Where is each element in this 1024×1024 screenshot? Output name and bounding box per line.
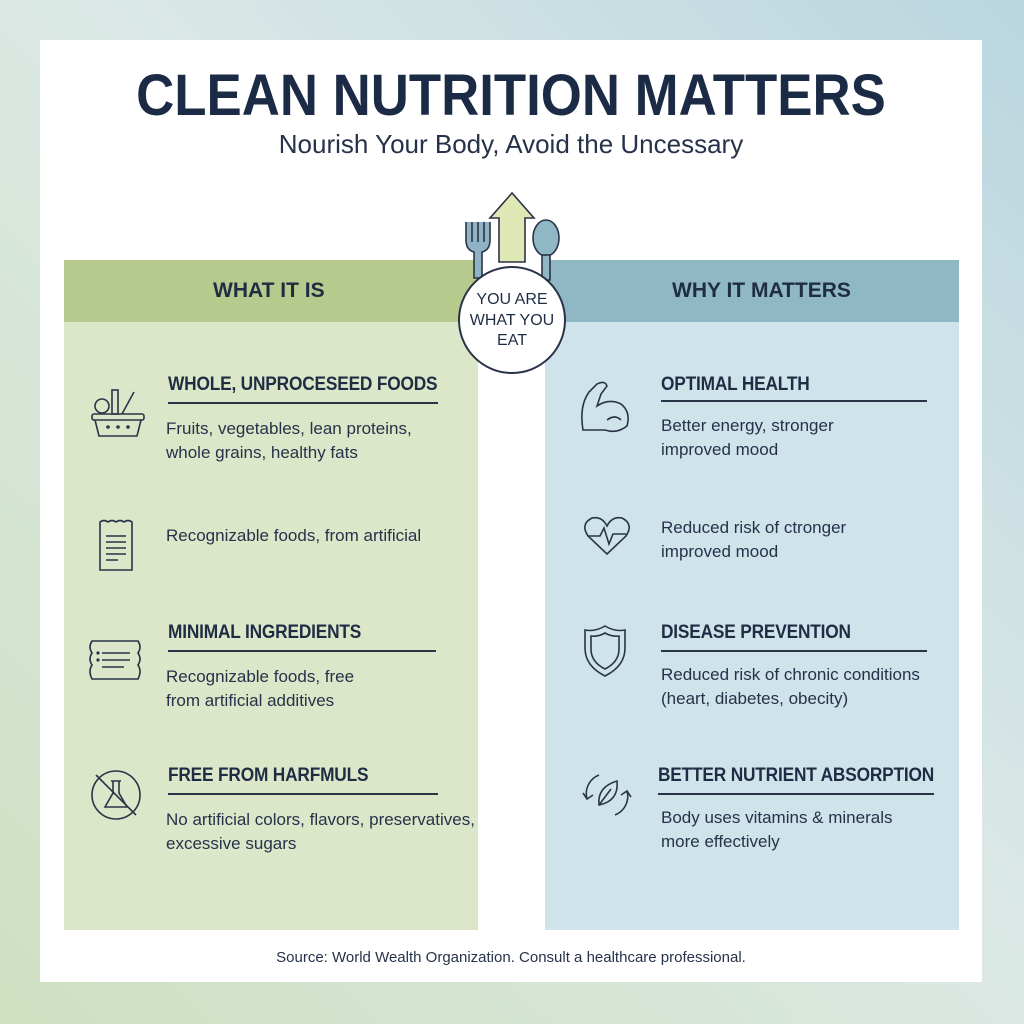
icon: shield <box>584 625 626 677</box>
panel: why it matters <box>545 260 959 930</box>
icon: ingredient list <box>89 640 141 680</box>
header: what it is: WHAT IT IS <box>213 279 325 302</box>
item: whole foods: whole grains, healthy fats <box>166 443 358 462</box>
header: why it matters: WHY IT MATTERS <box>672 279 851 302</box>
item: disease prevention: DISEASE PREVENTION <box>661 622 851 643</box>
item: disease prevention: Reduced risk of chronic conditions <box>661 665 920 684</box>
item: whole foods: Fruits, vegetables, lean proteins, <box>166 419 412 438</box>
item: optimal health: OPTIMAL HEALTH <box>661 374 810 395</box>
source footnote: Source: World Wealth Organization. Consult a healthcare professional. <box>276 949 746 966</box>
item: recognizable foods <box>99 520 421 571</box>
item: recognizable foods: Recognizable foods, from artificial <box>166 526 421 545</box>
icon: fork spoon arrow badge: YOU ARE <box>476 291 548 308</box>
item: disease prevention <box>584 622 927 708</box>
item: minimal ingredients: MINIMAL INGREDIENTS <box>168 622 361 643</box>
item: nutrient absorption <box>582 765 934 851</box>
item: optimal health: Better energy, stronger <box>661 416 834 435</box>
title: CLEAN NUTRITION MATTERS <box>136 63 886 128</box>
icon: fork spoon arrow badge: EAT <box>497 332 527 349</box>
icon: receipt <box>99 520 133 571</box>
item: free from harmfuls <box>91 765 475 853</box>
icon: basket <box>91 389 145 437</box>
subtitle: Nourish Your Body, Avoid the Uncessary <box>279 129 743 159</box>
item: nutrient absorption: BETTER NUTRIENT ABSORPTION <box>658 765 934 786</box>
item: reduced risk <box>584 516 846 561</box>
item: whole foods: WHOLE, UNPROCESEED FOODS <box>168 374 437 395</box>
icon: muscle arm <box>581 382 629 432</box>
icon: fork spoon arrow badge: WHAT YOU <box>470 312 554 329</box>
item: optimal health: improved mood <box>661 440 778 459</box>
item: disease prevention: (heart, diabetes, obecity) <box>661 689 848 708</box>
item: reduced risk: Reduced risk of ctronger <box>661 518 846 537</box>
item: minimal ingredients: from artificial additives <box>166 691 334 710</box>
item: nutrient absorption: Body uses vitamins & minerals <box>661 808 892 827</box>
item: whole foods <box>91 374 438 462</box>
item: free from harmfuls: FREE FROM HARFMULS <box>168 765 368 786</box>
item: free from harmfuls: excessive sugars <box>166 834 296 853</box>
header: why it matters <box>545 260 959 322</box>
panel: what it is <box>64 260 478 930</box>
item: optimal health <box>581 374 927 459</box>
icon: leaf cycle <box>582 774 632 816</box>
header: what it is <box>64 260 478 322</box>
icon: no chemicals <box>91 770 141 820</box>
item: reduced risk: improved mood <box>661 542 778 561</box>
icon: heart pulse <box>584 516 630 555</box>
item: minimal ingredients: Recognizable foods, free <box>166 667 354 686</box>
item: free from harmfuls: No artificial colors, flavors, preservatives, <box>166 810 475 829</box>
item: nutrient absorption: more effectively <box>661 832 780 851</box>
item: minimal ingredients <box>89 622 436 710</box>
icon: fork spoon arrow badge <box>458 192 566 374</box>
